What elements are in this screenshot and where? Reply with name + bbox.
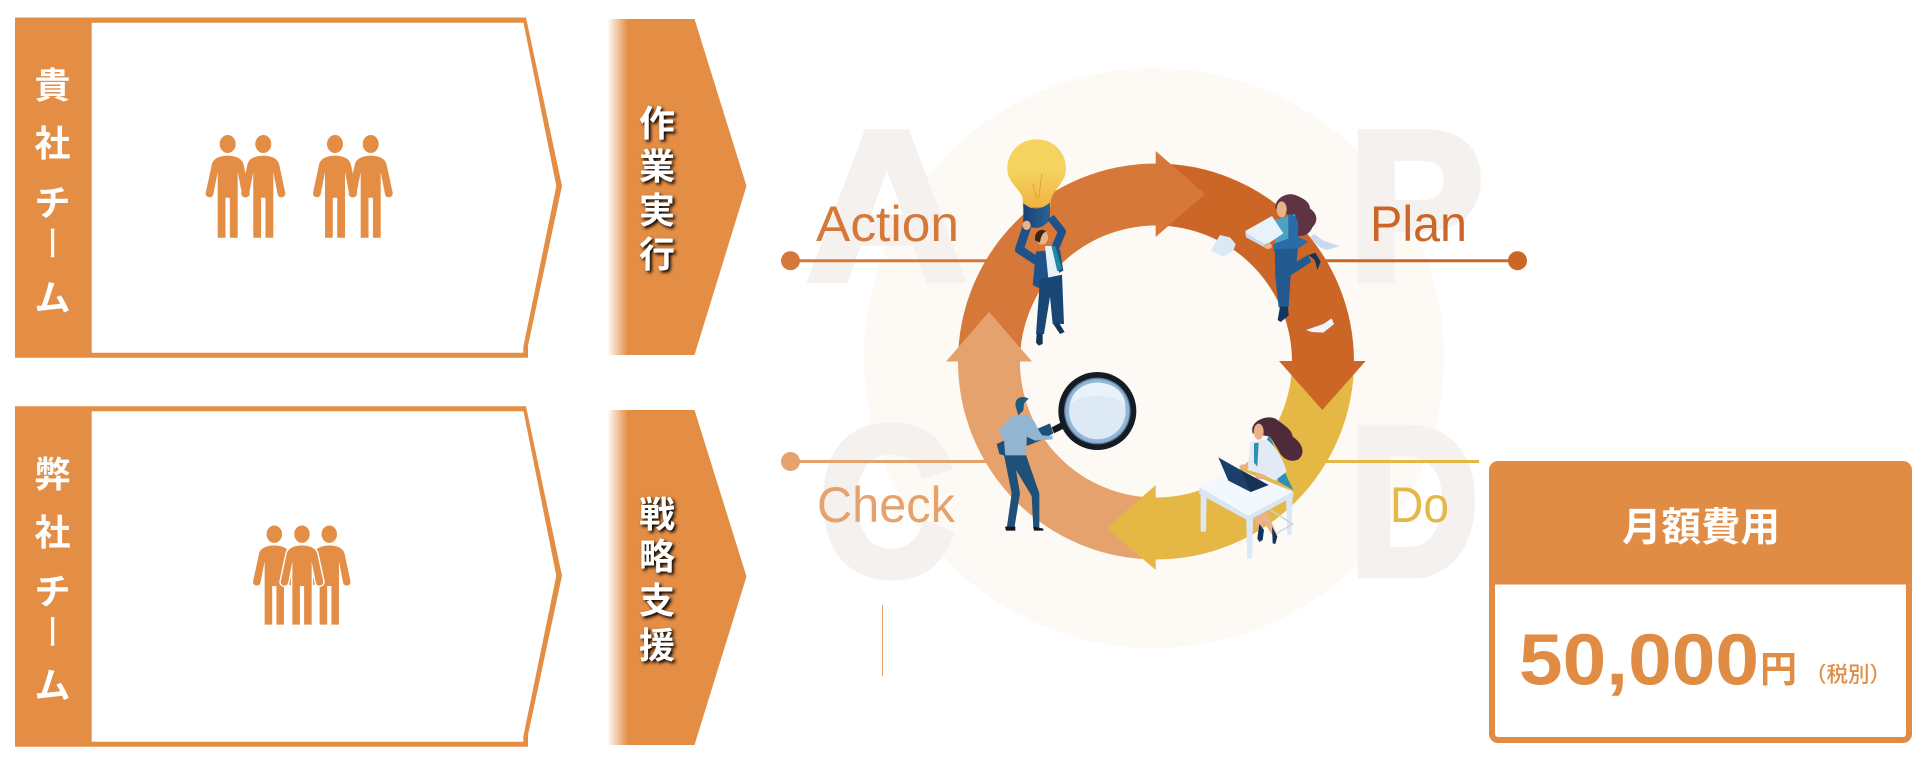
illustration: woman at desk with laptop [1199, 417, 1303, 559]
action leader line [781, 251, 990, 270]
heading: client team vertical label [31, 65, 72, 318]
arrow: work execution [606, 18, 746, 356]
text: strategy support: 支 [639, 580, 675, 621]
heading: our team vertical label: 弊 [34, 454, 71, 495]
background letters: A [807, 87, 967, 324]
price: 50,000 [1519, 620, 1759, 700]
icon: four people [206, 135, 393, 238]
heading: client team vertical label: ム [34, 278, 71, 318]
text: work execution: 実 [639, 190, 675, 231]
price: 円 [1760, 649, 1797, 690]
text: work execution: 作 [639, 103, 675, 144]
heading: our team vertical label: ー [31, 613, 72, 650]
text: strategy support: 援 [639, 625, 675, 666]
icon: three people [253, 526, 351, 625]
do leader line [1320, 460, 1479, 463]
label: Plan: Plan [1370, 196, 1467, 252]
PDCA ring [946, 151, 1366, 570]
panel: monthly fee [1489, 461, 1912, 743]
segment: action [958, 164, 1156, 361]
arrowhead: plan [1279, 361, 1366, 410]
heading: our team vertical label: ム [34, 665, 71, 706]
panel: our team [15, 406, 562, 747]
heading: client team vertical label: 社 [34, 123, 71, 164]
label: Do: Do [1390, 477, 1449, 533]
plan leader line [1320, 251, 1527, 270]
arrowhead: check [946, 312, 1032, 362]
heading: client team vertical label: ー [31, 225, 72, 261]
panel: client team [15, 18, 562, 358]
text: strategy support: 略 [639, 536, 675, 577]
illustration: woman running with papers [1211, 194, 1340, 333]
segment: plan [1156, 164, 1354, 362]
background letters: D [1349, 382, 1479, 620]
text: work execution: 業 [639, 146, 675, 187]
text: work execution [639, 103, 675, 275]
illustration: man with magnifying glass [997, 372, 1136, 531]
segment: check [958, 359, 1156, 560]
heading: client team vertical label: 貴 [34, 65, 71, 106]
background letters [807, 87, 1484, 620]
heading: monthly fee: 月額費用 [1622, 506, 1780, 550]
price [1519, 620, 1891, 700]
arrowhead: do [1107, 485, 1156, 570]
background letters: C [819, 382, 955, 620]
arrow: strategy support [606, 409, 746, 746]
text: strategy support: 戦 [639, 494, 675, 535]
vertical tick [882, 605, 884, 676]
price: （税別） [1805, 663, 1891, 687]
label: Action: Action [816, 196, 959, 252]
label: Check: Check [817, 477, 956, 533]
background letters: P [1348, 87, 1484, 324]
heading: our team vertical label [31, 454, 72, 706]
text: work execution: 行 [639, 234, 675, 275]
heading: our team vertical label: 社 [34, 512, 71, 553]
segment: do [1156, 362, 1354, 560]
heading: client team vertical label: チ [34, 182, 71, 224]
arrowhead: action [1156, 151, 1205, 237]
illustration: man holding light bulb [1007, 139, 1066, 346]
background circle [864, 68, 1444, 648]
check leader line [781, 452, 990, 471]
text: strategy support [639, 494, 675, 666]
heading: our team vertical label: チ [34, 571, 71, 612]
